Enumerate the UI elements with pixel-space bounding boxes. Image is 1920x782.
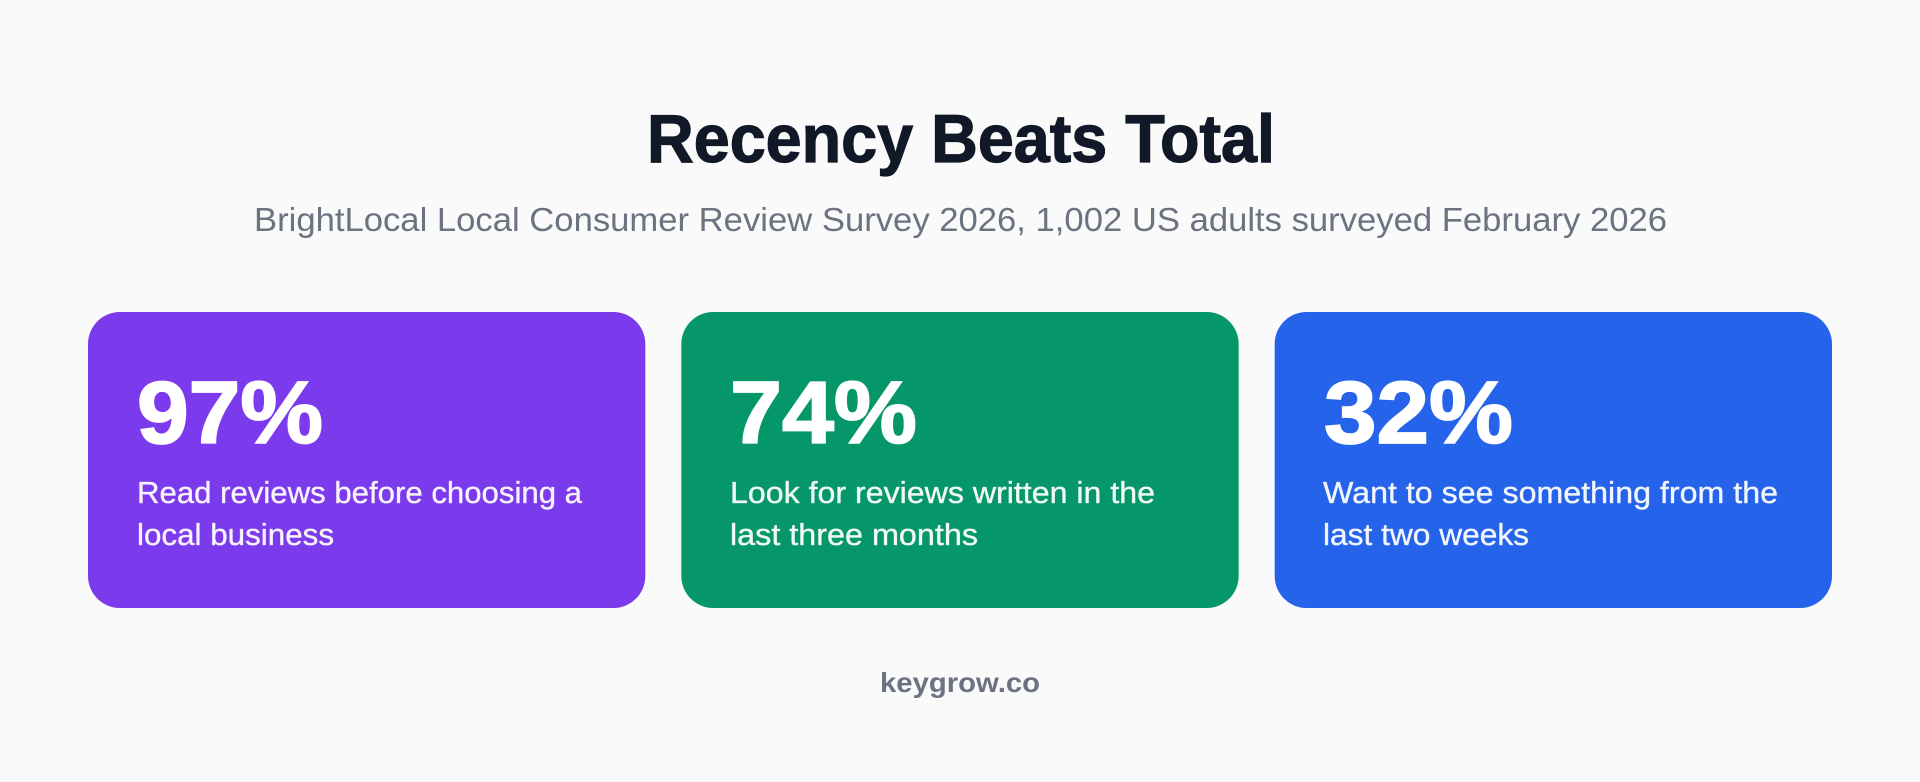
stat label: recent reviews: Look for reviews written in the [730, 475, 1155, 510]
stat label: last two weeks: last two weeks [1323, 517, 1529, 552]
panel: 97% stat card [88, 312, 645, 608]
panel: 74% stat card [681, 312, 1239, 608]
stat label: read reviews: Read reviews before choosing a [137, 475, 583, 510]
stat number: 32%: 32% [1324, 363, 1513, 462]
stat label: read reviews: local business [137, 517, 334, 552]
panel: 32% stat card [1275, 312, 1832, 608]
stat number: 74%: 74% [730, 363, 917, 462]
subtitle: BrightLocal Local Consumer Review Survey 2026, 1,002 US adults surveyed February 2026 [254, 202, 1667, 239]
stat label: last two weeks: Want to see something from the [1323, 475, 1778, 510]
stat number: 97%: 97% [137, 363, 323, 462]
title: Recency Beats Total [647, 101, 1275, 177]
stat label: recent reviews: last three months [730, 517, 978, 552]
footer brand: keygrow.co [880, 667, 1040, 698]
